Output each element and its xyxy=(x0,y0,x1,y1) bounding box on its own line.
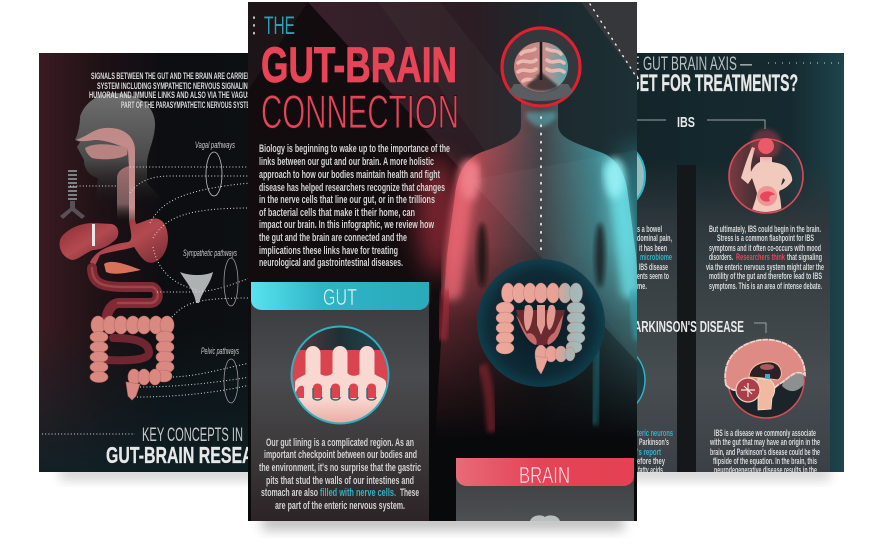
text block: IBS column left: ents seem to xyxy=(637,271,669,282)
text block: gut lining xyxy=(259,437,421,512)
text block: introduction: in the nerve cells that line our gut, or in the trillions xyxy=(259,194,435,206)
neck glow xyxy=(526,112,556,127)
title: gut-brain: GUT-BRAIN xyxy=(261,37,457,93)
text block: Parkinson's column left: fatty acids xyxy=(638,465,663,476)
heading: gut: GUT xyxy=(323,284,357,310)
text block: introduction: approach to how our bodies maintain health and fight xyxy=(259,169,440,181)
text block: introduction: of bacterial cells that make it their home, can xyxy=(259,207,415,219)
icon: large intestine xyxy=(90,316,174,400)
heading: the gut brain axis: THE GUT BRAIN AXIS — xyxy=(616,54,752,75)
text block: IBS column left: it has been xyxy=(639,243,667,254)
heading: Parkinson's disease xyxy=(637,321,766,333)
text block: IBS column left: s a bowel xyxy=(637,224,662,235)
panel: gut xyxy=(251,282,429,521)
label: pelvic pathways: Pelvic pathways xyxy=(201,346,239,356)
icon: brain top xyxy=(530,515,560,521)
text block: gut lining: the environment, it's no surprise that the gastric xyxy=(259,462,421,474)
text block: introduction: impact our brain. In this infographic, we review how xyxy=(259,219,434,231)
text block: gut lining: These xyxy=(400,487,419,499)
heading: Parkinson's disease: PARKINSON'S DISEASE xyxy=(628,319,744,336)
text block: introduction: links between our gut and our brain. A more holistic xyxy=(259,156,434,168)
icon: brain in circle xyxy=(502,28,580,106)
text block: signals paragraph: HUMORAL AND IMMUNE LINKS AND ALSO VIA THE VAGUS xyxy=(89,90,251,101)
text block: signals paragraph: PART OF THE PARASYMPATHETIC NERVOUS SYSTEM xyxy=(121,100,254,111)
panel: main page gut-brain connection xyxy=(248,2,656,521)
text block: Parkinson's column left xyxy=(637,430,673,472)
spinal cord dots xyxy=(540,117,542,252)
label: vagal pathways: Vagal pathways xyxy=(195,140,235,150)
text block: IBS column left xyxy=(637,224,672,292)
icon: IBS figure xyxy=(729,129,803,214)
text block: Parkinson's column left: efore they xyxy=(637,456,665,467)
panel: brain xyxy=(456,458,634,521)
panel: right page treatments xyxy=(637,53,844,472)
text block: Parkinson's column left: teric neurons xyxy=(637,428,673,439)
text block: gut lining: filled with nerve cells. xyxy=(320,487,396,499)
text block: introduction xyxy=(259,143,450,269)
icon: pancreas xyxy=(104,262,141,274)
heading: brain: BRAIN xyxy=(519,462,570,488)
icon: pelvic organ xyxy=(180,272,213,303)
icon: gut lining xyxy=(290,325,390,426)
icon: Parkinson's brain xyxy=(725,340,805,418)
icon: head silhouette xyxy=(75,93,165,203)
heading: key concepts in: KEY CONCEPTS IN xyxy=(142,425,243,446)
text block: introduction: implications these links have for treating xyxy=(259,245,398,257)
text block: signals paragraph: SYSTEM INCLUDING SYMPATHETIC NERVOUS SIGNALING xyxy=(97,81,252,92)
icon: liver xyxy=(60,223,118,260)
text block: IBS column right: that signaling xyxy=(787,252,822,263)
icon: intestines in circle xyxy=(477,259,605,387)
text block: introduction: neurological and gastrointestinal diseases. xyxy=(259,257,403,269)
text block: Parkinson's column left: 's report xyxy=(637,447,662,458)
arm highlights xyxy=(452,170,470,290)
icon: trachea xyxy=(60,170,85,219)
icon: nasal cavity and oesophagus xyxy=(76,128,135,222)
text block: IBS column left: microbiome xyxy=(640,252,672,263)
title: the: THE xyxy=(264,12,295,40)
icon: IBS left circle edge xyxy=(637,152,646,200)
text block: gut lining: are part of the enteric nervous system. xyxy=(275,500,405,512)
illustration: human body xyxy=(435,100,650,440)
text block: Parkinson's column right xyxy=(710,430,820,472)
icon: stomach xyxy=(90,219,168,268)
text block: IBS column right xyxy=(706,224,824,292)
icon: Parkinson's left circle edge xyxy=(637,356,646,404)
text block: IBS column right: Researchers think xyxy=(736,252,785,263)
text block: gut lining: stomach are also xyxy=(261,487,318,499)
text block: introduction: disease has helped researchers recognize that changes xyxy=(259,182,445,194)
heading: IBS xyxy=(637,117,766,129)
text block: IBS column right: disorders. xyxy=(709,252,733,263)
text block: introduction: Biology is beginning to wake up to the importance of the xyxy=(259,143,450,155)
text block: introduction: the gut and the brain are connected and the xyxy=(259,232,407,244)
text block: signals paragraph: SIGNALS BETWEEN THE GUT AND THE BRAIN ARE CARRIED xyxy=(91,71,251,82)
text block: gut lining: important checkpoint between our bodies and xyxy=(264,449,417,461)
heading: gut-brain research: GUT-BRAIN RESEARCH xyxy=(106,442,288,468)
heading: gut xyxy=(251,282,429,310)
icon: small intestine xyxy=(92,268,158,360)
text block: Parkinson's column left: Parkinson's xyxy=(639,437,669,448)
text block: IBS column left: me. xyxy=(637,281,647,292)
diagram: dotted nerve pathways xyxy=(70,152,250,403)
label: sympathetic pathways: Sympathetic pathways xyxy=(183,248,237,258)
glows around body xyxy=(416,145,656,275)
diagonal light overlay xyxy=(470,150,637,362)
panel: left page key concepts xyxy=(39,53,288,472)
text block: gut lining: pits that stud the walls of our intestines and xyxy=(266,475,414,487)
diagonal backdrop xyxy=(248,2,637,521)
heading: IBS: IBS xyxy=(677,114,695,131)
text block: IBS column right: Stress is a common flashpoint for IBS xyxy=(717,233,814,244)
text block: IBS column left: dominal pain, xyxy=(637,233,672,244)
text block: gut lining: Our gut lining is a complicated region. As an xyxy=(266,437,414,449)
heading: brain xyxy=(456,458,634,488)
title: connection: CONNECTION xyxy=(261,86,459,139)
shadows beneath pages xyxy=(60,466,830,530)
text block: signals paragraph xyxy=(89,71,254,111)
text block: IBS column left: IBS disease xyxy=(639,262,668,273)
